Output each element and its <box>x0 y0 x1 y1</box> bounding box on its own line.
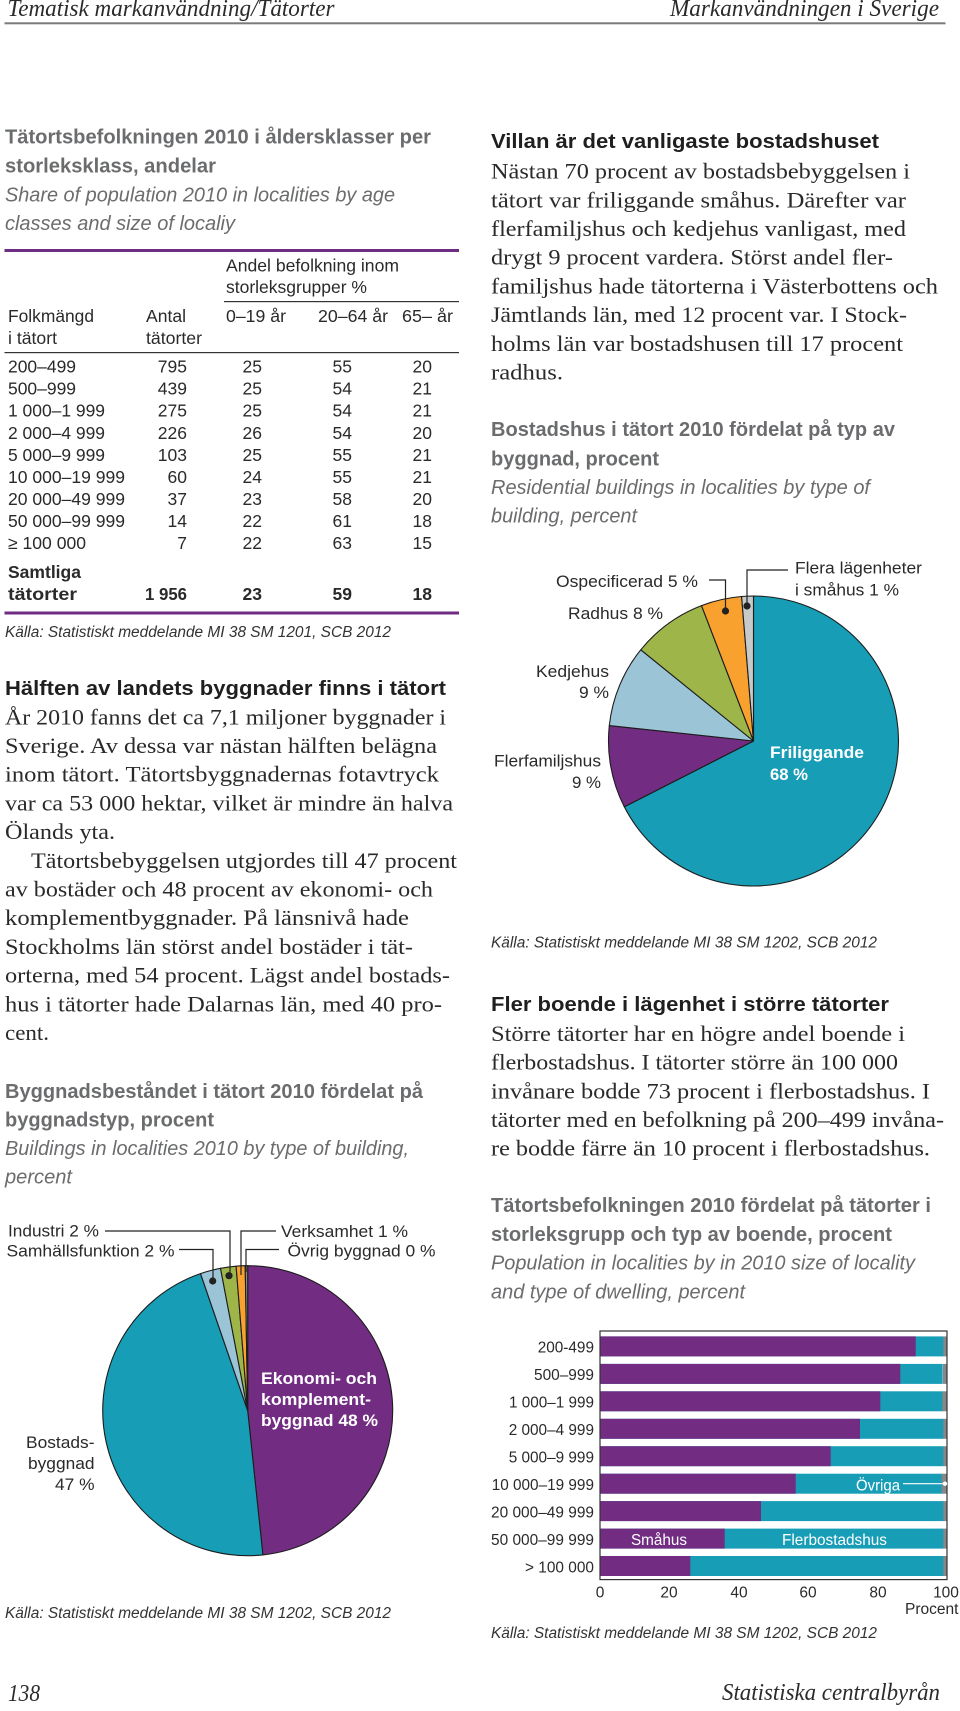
residential pie heading: Bostadshus i tätort 2010 fördelat på typ av <box>491 418 896 441</box>
category labels: 20 000–49 999 <box>491 1505 594 1522</box>
text block: Hälften av landets byggnader: var ca 53 000 hektar, vilket är mindre än halva <box>5 790 453 815</box>
text block: Villan är det vanligaste bostadshuset: Jämtlands län, med 12 procent var. I Stock- <box>491 302 907 327</box>
category labels: 10 000–19 999 <box>492 1477 594 1494</box>
text block: Fler boende i lägenhet: re bodde färre än 10 procent i flerbostadshus. <box>491 1136 930 1161</box>
text block: Hälften av landets byggnader: Tätortsbebyggelsen utgjordes till 47 procent <box>31 848 457 873</box>
table rows: 1 000–1 999 <box>8 401 105 421</box>
table rows: 55 <box>333 445 352 465</box>
bar chart heading: Tätortsbefolkningen 2010 fördelat på tätorter i <box>491 1194 931 1217</box>
text block: Hälften av landets byggnader: hus i tätorter hade Dalarnas län, med 40 pro- <box>5 991 442 1016</box>
table rows: 439 <box>158 379 187 399</box>
table rows: 2 000–4 999 <box>8 423 105 443</box>
table rows: 54 <box>333 401 352 421</box>
pie labels: 9 % <box>572 774 601 792</box>
table total row <box>8 562 432 604</box>
pie labels: Samhällsfunktion 2 % <box>6 1242 175 1260</box>
residential pie heading <box>491 418 896 528</box>
bar chart heading: storleksgrupp och typ av boende, procent <box>491 1224 892 1246</box>
pie labels <box>6 1222 436 1494</box>
table rows: 500–999 <box>8 379 76 399</box>
table rows: 795 <box>158 356 187 376</box>
table total row: 23 <box>243 584 262 604</box>
table rows: ≥ 100 000 <box>8 533 86 553</box>
table total row: tätorter <box>8 584 77 604</box>
table rows: 37 <box>168 489 187 509</box>
text block: Villan är det vanligaste bostadshuset: flerfamiljshus och kedjehus vanligast, med <box>491 216 906 241</box>
pie labels: byggnad <box>28 1455 94 1473</box>
table rows: 14 <box>168 511 187 531</box>
text block: Hälften av landets byggnader: av bostäder och 48 procent av ekonomi- och <box>5 876 433 902</box>
residential pie source: Källa: Statistiskt meddelande MI 38 SM 1202, SCB 2012 <box>491 935 877 952</box>
pie labels: komplement- <box>261 1391 371 1409</box>
series labels: Småhus <box>631 1532 687 1549</box>
text block: Fler boende i lägenhet: Större tätorter har en högre andel boende i <box>491 1021 905 1046</box>
table rows: 20 <box>413 423 432 443</box>
table rows: 103 <box>158 445 187 465</box>
text block: Fler boende i lägenhet: flerbostadshus. I tätorter större än 100 000 <box>491 1050 898 1074</box>
pie labels: Ospecificerad 5 % <box>556 573 698 591</box>
table heading: Share of population 2010 in localities by age <box>5 184 395 206</box>
table rows: 23 <box>243 489 262 509</box>
table rows: 10 000–19 999 <box>8 467 125 487</box>
table rows: 200–499 <box>8 356 76 376</box>
table column headers: storleksgrupper % <box>226 277 367 297</box>
text block: Villan är det vanligaste bostadshuset: holms län var bostadshusen till 17 procent <box>491 331 903 356</box>
buildings pie heading <box>4 1080 424 1188</box>
text block: Villan är det vanligaste bostadshuset: radhus. <box>491 360 563 384</box>
section heading: Villan är det vanligaste bostadshuset <box>491 131 879 153</box>
pie labels: Övrig byggnad 0 % <box>288 1242 436 1260</box>
table rows: 21 <box>413 401 432 421</box>
axis labels: 80 <box>869 1584 887 1602</box>
pie labels: 9 % <box>579 684 609 702</box>
pie labels: Kedjehus <box>536 663 609 681</box>
table column headers: 0–19 år <box>226 306 286 326</box>
table rows: 22 <box>243 533 262 553</box>
table heading: storleksklass, andelar <box>5 155 216 177</box>
pie labels: Verksamhet 1 % <box>281 1223 408 1241</box>
table rows: 21 <box>413 379 432 399</box>
bar chart heading: and type of dwelling, percent <box>491 1282 746 1304</box>
table rows: 26 <box>243 423 262 443</box>
pie labels: Ekonomi- och <box>261 1370 377 1388</box>
text block: Hälften av landets byggnader: komplementbyggnader. På länsnivå hade <box>5 905 409 930</box>
text block: Fler boende i lägenhet: tätorter med en befolkning på 200–499 invåna- <box>491 1107 944 1132</box>
bar chart: dwelling type by locality size <box>491 1331 959 1618</box>
section heading: Fler boende i lägenhet i större tätorter <box>491 994 889 1016</box>
table rows: 18 <box>413 511 432 531</box>
text block: Villan är det vanligaste bostadshuset: tätort var friliggande småhus. Därefter var <box>491 187 907 212</box>
table total row: Samtliga <box>8 562 81 582</box>
text block: Villan är det vanligaste bostadshuset: drygt 9 procent vardera. Störst andel fler- <box>491 245 893 270</box>
pie labels: byggnad 48 % <box>261 1412 378 1430</box>
buildings pie heading: byggnadstyp, procent <box>5 1110 214 1132</box>
page header <box>4 0 946 24</box>
category labels: 2 000–4 999 <box>509 1422 594 1439</box>
series labels: Övriga <box>856 1476 900 1494</box>
table total row: 1 956 <box>145 584 187 604</box>
table column headers: i tätort <box>8 328 57 348</box>
table rows: 226 <box>158 423 187 443</box>
buildings pie heading: Byggnadsbeståndet i tätort 2010 fördelat på <box>5 1080 424 1103</box>
table rows: 58 <box>333 489 352 509</box>
series labels: Flerbostadshus <box>782 1532 887 1549</box>
axis labels: 20 <box>660 1584 678 1602</box>
category labels: 200-499 <box>538 1340 594 1357</box>
text block: Hälften av landets byggnader: inom tätort. Tätortsbyggnadernas fotavtryck <box>5 762 439 787</box>
buildings pie source: Källa: Statistiskt meddelande MI 38 SM 1202, SCB 2012 <box>5 1605 391 1622</box>
table rows: 20 000–49 999 <box>8 489 125 509</box>
table column headers: 20–64 år <box>318 306 388 326</box>
table heading <box>5 126 431 235</box>
category labels: 50 000–99 999 <box>491 1532 594 1549</box>
buildings pie heading: Buildings in localities 2010 by type of building, <box>5 1138 409 1160</box>
text block: Hälften av landets byggnader: År 2010 fanns det ca 7,1 miljoner byggnader i <box>5 704 446 729</box>
pie labels: Flerfamiljshus <box>494 753 601 771</box>
category labels: 1 000–1 999 <box>509 1395 594 1412</box>
table rows: 20 <box>413 489 432 509</box>
table column headers: 65– år <box>402 306 453 326</box>
table column headers <box>8 256 453 348</box>
table rows: 55 <box>333 467 352 487</box>
pie labels: 47 % <box>55 1476 95 1494</box>
stacked bars <box>600 1336 947 1576</box>
table rows: 25 <box>243 445 262 465</box>
table rows: 22 <box>243 511 262 531</box>
table rows: 55 <box>333 356 352 376</box>
category labels: 5 000–9 999 <box>509 1450 594 1467</box>
pie labels: Bostads- <box>26 1434 94 1452</box>
text block: Hälften av landets byggnader: Sverige. Av dessa var nästan hälften belägna <box>5 733 437 758</box>
table rows: 25 <box>243 401 262 421</box>
category labels: > 100 000 <box>525 1560 594 1577</box>
table rows: 61 <box>333 511 352 531</box>
text block: Fler boende i lägenhet: invånare bodde 73 procent i flerbostadshus. I <box>491 1078 930 1103</box>
pie labels: i småhus 1 % <box>795 582 899 600</box>
pie chart: buildings by type <box>6 1222 436 1556</box>
text block: Hälften av landets byggnader: orterna, med 54 procent. Lägst andel bostads- <box>5 963 450 988</box>
text block: Hälften av landets byggnader <box>5 678 457 1045</box>
leader lines and dots <box>105 1231 279 1285</box>
text block: Hälften av landets byggnader: Ölands yta. <box>5 819 115 844</box>
table rows: 60 <box>168 467 187 487</box>
table rows: 54 <box>333 423 352 443</box>
axis labels: 0 <box>596 1584 605 1602</box>
table rows: 21 <box>413 467 432 487</box>
residential pie heading: byggnad, procent <box>491 448 659 470</box>
pie labels: Radhus 8 % <box>568 605 663 623</box>
pie labels: Friliggande <box>770 744 864 762</box>
text block: Fler boende i lägenhet <box>491 994 944 1161</box>
table column headers: Folkmängd <box>8 306 94 326</box>
pie labels: Industri 2 % <box>8 1222 99 1240</box>
table heading: classes and size of localiy <box>5 213 236 235</box>
table rows: 54 <box>333 379 352 399</box>
table heading: Tätortsbefolkningen 2010 i åldersklasser per <box>5 126 431 148</box>
pie labels: Flera lägenheter <box>795 560 923 578</box>
category labels: 500–999 <box>534 1367 594 1384</box>
table rows: 25 <box>243 379 262 399</box>
table rows: 7 <box>177 533 187 553</box>
text block: Hälften av landets byggnader: cent. <box>5 1020 49 1045</box>
pie labels <box>494 560 923 792</box>
residential pie heading: Residential buildings in localities by type of <box>491 477 872 499</box>
buildings pie heading: percent <box>4 1166 73 1188</box>
table rows: 275 <box>158 401 187 421</box>
leader lines and dots <box>709 570 788 615</box>
category labels <box>491 1340 594 1577</box>
axis labels: 60 <box>799 1584 817 1602</box>
table rows: 25 <box>243 356 262 376</box>
text block: Villan är det vanligaste bostadshuset <box>491 131 938 384</box>
table rows: 15 <box>413 533 432 553</box>
pie chart: residential buildings <box>494 560 923 886</box>
table source: Källa: Statistiskt meddelande MI 38 SM 1201, SCB 2012 <box>5 624 391 641</box>
table rows: 20 <box>413 356 432 376</box>
residential pie heading: building, percent <box>491 506 638 528</box>
axis labels <box>596 1584 959 1618</box>
table rows: 50 000–99 999 <box>8 511 125 531</box>
pie labels: 68 % <box>770 766 808 784</box>
publisher name: Statistiska centralbyrån <box>722 1680 940 1706</box>
table rows <box>8 356 432 553</box>
axis labels: 40 <box>730 1584 748 1602</box>
axis labels: 100 <box>933 1584 959 1602</box>
panel: population table <box>4 249 459 614</box>
table rows: 24 <box>243 467 262 487</box>
table total row: 18 <box>413 584 432 604</box>
text block: Villan är det vanligaste bostadshuset: Nästan 70 procent av bostadsbebyggelsen i <box>491 159 910 184</box>
table rows: 63 <box>333 533 352 553</box>
axis labels: Procent <box>905 1601 959 1618</box>
table column headers: tätorter <box>146 328 202 348</box>
table rows: 21 <box>413 445 432 465</box>
series labels <box>631 1476 947 1549</box>
table rows: 5 000–9 999 <box>8 445 105 465</box>
text block: Villan är det vanligaste bostadshuset: familjshus hade tätorterna i Västerbottens och <box>491 273 938 298</box>
text block: Hälften av landets byggnader: Stockholms län störst andel bostäder i tät- <box>5 934 413 959</box>
bar chart source: Källa: Statistiskt meddelande MI 38 SM 1202, SCB 2012 <box>491 1625 877 1642</box>
bar chart heading: Population in localities by in 2010 size of locality <box>491 1253 916 1275</box>
bar chart heading <box>491 1194 931 1304</box>
table column headers: Antal <box>146 306 186 326</box>
section heading: Hälften av landets byggnader finns i tätort <box>5 678 446 700</box>
page number: 138 <box>8 1681 40 1707</box>
table total row: 59 <box>333 584 352 604</box>
table column headers: Andel befolkning inom <box>226 256 399 276</box>
